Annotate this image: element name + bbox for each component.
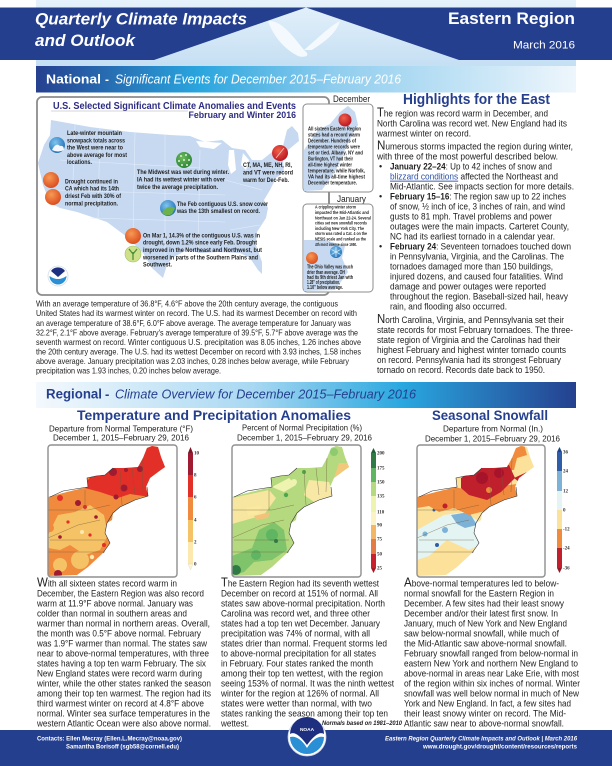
text block: precipitation narrative: states had a top ten wet December. January: [221, 619, 380, 629]
January storm text: A crippling winter storm: [315, 205, 356, 211]
temperature map subtitle: Departure from Normal Temperature (°F): [49, 423, 193, 433]
text block: temperature narrative: colder than normal in southern areas and: [37, 609, 187, 619]
legend: precipitation: [371, 448, 385, 573]
legend: temperature: 6: [194, 496, 197, 500]
map title: [51, 101, 296, 120]
label: January: January: [337, 194, 366, 204]
heading: temperature and precipitation: Temperature and Precipitation Anomalies: [77, 407, 351, 423]
text block: precipitation narrative: among their top ten wettest, with the region: [221, 669, 383, 679]
January storm text: NESIS scale and ranked as the: [315, 236, 366, 242]
national section bar: National: [46, 72, 101, 86]
Ohio Valley text: 1.10" below average.: [307, 285, 343, 291]
text block: highlights bullets: January 22–24: Up to 42 inches of snow and: [390, 162, 552, 172]
regional section bar: -: [105, 386, 109, 402]
map callouts: On Mar 1, 14.3% of the contiguous U.S. was in: [143, 232, 260, 239]
December text: December. Hundreds of: [308, 138, 356, 144]
precipitation map subtitle: Percent of Normal Precipitation (%): [242, 423, 362, 433]
text block: highlights intro: warmest winter on record.: [376, 129, 471, 139]
text block: national summary: seventh warmest on record. Winter contiguous U.S. precipitation was 8.05 inches, 1.26 inches above: [36, 337, 361, 347]
map callouts: worsened in parts of the Southern Plains and: [142, 254, 258, 261]
December text: set or tied. Albany, NY and: [308, 150, 363, 156]
snowfall map subtitle: [425, 423, 560, 443]
precipitation map subtitle: [237, 423, 372, 443]
Ohio Valley text: had its 9th driest Jan with: [307, 275, 353, 281]
December text: [308, 126, 365, 186]
text block: tornado records: state records for most February tornadoes. The three-: [377, 325, 573, 335]
text block: national summary: the 20th century average. The U.S. had its wettest December on record with 3.93 inches, 1.58 inches: [36, 346, 361, 356]
map callouts: CT, MA, ME, NH, RI,: [243, 162, 292, 169]
January storm text: impacted the Mid-Atlantic and: [315, 210, 369, 216]
label: December: December: [333, 94, 370, 104]
temperature map subtitle: [49, 423, 193, 443]
header band: [0, 8, 306, 60]
January storm text: [315, 205, 371, 248]
text block: highlights bullets: February 15–16: The region saw up to 22 inches: [390, 192, 566, 202]
legend: snowfall: [557, 447, 570, 573]
US map shape: [38, 120, 299, 278]
text block: snowfall narrative: saw below-normal snowfall, while much of: [404, 629, 559, 639]
text block: temperature narrative: the month was 0.5°F above normal. February: [37, 629, 201, 639]
chart: precipitation percent map: [231, 444, 362, 578]
text block: precipitation narrative: [220, 576, 394, 729]
text block: national summary: 32.2°F, 2.1°F above average. February's average temperature of 39.5°F, 5.7°F above average was the: [36, 327, 358, 337]
January storm text: 4th most intense since 1950.: [315, 242, 357, 248]
map callouts: twice the average precipitation.: [137, 184, 218, 191]
icon: drought 3: [125, 228, 141, 244]
text block: highlights bullets: rain, and flooding also occurred.: [390, 302, 507, 312]
panel: January box: [303, 204, 373, 292]
map title: U.S. Selected Significant Climate Anomalies and Events: [53, 101, 296, 112]
text block: highlights bullets: injured dozens, and caused four fatalities. Wind: [390, 272, 563, 282]
footer publication info: www.drought.gov/drought/content/resources/reports: [422, 744, 577, 751]
legend: snowfall: -24: [563, 546, 570, 552]
text block: snowfall narrative: January, much of New York and New England: [404, 619, 567, 629]
January storm text: Northeast on Jan 22-24. Several: [315, 215, 371, 221]
map callouts: Southwest.: [143, 262, 172, 269]
icon: NOAA logo: NOAA: [300, 727, 315, 733]
text block: precipitation narrative: in February. Four states ranked the month: [221, 659, 373, 669]
text block: highlights bullets: •: [379, 192, 382, 202]
text block: highlights bullets: blizzard conditions affected the Northeast and: [390, 172, 558, 182]
text block: temperature narrative: warmer than normal in northern areas. Overall,: [36, 619, 210, 629]
text block: highlights intro: The region was record warm in December, and: [377, 106, 548, 120]
regional section bar: Climate Overview for December 2015–February 2016: [115, 386, 417, 402]
legend: snowfall: 24: [563, 470, 568, 474]
text block: tornado records: on record. Pennsylvania had its strongest February: [377, 355, 561, 365]
text block: snowfall narrative: of the region within six inches of normal. Winter: [404, 679, 580, 689]
December text: states had a record warm: [308, 132, 360, 138]
map callouts: IA had its wettest winter with over: [137, 176, 225, 184]
panel: US anomalies map: [37, 97, 329, 295]
icon: drought improved: [125, 246, 141, 262]
December text: temperature records were: [308, 144, 360, 150]
text block: highlights bullets: throughout the region. Baseball-sized hail, heavy: [390, 292, 568, 302]
text block: temperature narrative: December, the Eastern Region was also record: [37, 589, 204, 599]
icon: record warm: [272, 145, 288, 161]
text block: tornado records: tornado on record. Records date back to 1950.: [377, 365, 545, 375]
region and date: Eastern Region: [448, 10, 575, 28]
December text: VA had its all-time highest: [308, 174, 365, 180]
icon: NOAA logo small: [48, 266, 68, 286]
icon: drought 1: [43, 172, 59, 188]
legend: precipitation: 50: [377, 552, 382, 558]
text block: temperature narrative: third warmest winter on record at 4.8°F above: [37, 699, 204, 709]
national section bar: -: [105, 72, 109, 86]
text block: temperature narrative: [36, 576, 211, 729]
text block: national summary: precipitation was 1.93 inches, 0.20 inches below average.: [36, 366, 221, 376]
text block: temperature narrative: winter, while the other states ranked the season: [36, 679, 211, 689]
footer contacts: Contacts: Ellen Mecray (Ellen.L.Mecray@noaa.gov): [37, 736, 182, 743]
legend: precipitation: 110: [377, 510, 385, 516]
text block: snowfall narrative: York and New England. In fact, a few sites had: [404, 699, 571, 709]
text block: temperature narrative: warm at 11.9°F above normal. January was: [36, 599, 193, 609]
map callouts: driest Feb with 30% of: [65, 193, 122, 200]
map callouts: locations.: [67, 159, 92, 166]
Ohio Valley text: [307, 265, 353, 291]
panel: December box: [303, 104, 373, 192]
text block: precipitation narrative: seeing 153% of normal. It was the ninth wettest: [221, 679, 394, 689]
heading: Highlights for the East: Highlights for the East: [403, 91, 550, 108]
text block: tornado records: state region of Virginia and the Carolinas had their: [377, 335, 560, 345]
text block: highlights intro: Numerous storms impacted the region during winter,: [377, 139, 573, 153]
text block: highlights bullets: NC had its earliest tornado in a calendar year.: [390, 232, 555, 242]
text block: national summary: [36, 299, 361, 376]
text block: temperature narrative: among their top ten warmest. The region had its: [37, 689, 211, 699]
connector between boxes: [328, 190, 330, 206]
map callouts: CA which had its 14th: [65, 186, 119, 193]
text block: precipitation narrative: states drier than normal. Frequent storms led: [221, 639, 387, 649]
legend: precipitation: 150: [377, 480, 385, 486]
legend: precipitation: 75: [377, 538, 382, 542]
December text: all-time highest winter: [308, 162, 352, 168]
legend: precipitation: 175: [377, 466, 385, 472]
map callouts: snowpack totals across: [67, 137, 125, 144]
legend: precipitation: 135: [377, 494, 385, 500]
map callouts: Drought continued in: [65, 178, 118, 185]
legend: temperature: 4: [194, 518, 197, 524]
legend: snowfall: 0: [563, 508, 566, 514]
map callouts: The Midwest was wet during winter.: [137, 169, 229, 176]
footer contacts: Samantha Borisoff (sgb58@cornell.edu): [66, 744, 179, 751]
chart: temperature departure map: [47, 444, 178, 578]
text block: highlights intro: North Carolina was record wet. New England had its: [377, 119, 567, 129]
legend: precipitation: 25: [377, 566, 382, 572]
footer publication info: [385, 736, 577, 751]
text block: highlights bullets: •: [379, 242, 382, 252]
footer contacts: [37, 736, 182, 751]
text block: highlights bullets: tornadoes damaged more than 150 buildings,: [390, 262, 553, 272]
text block: precipitation narrative: December on record at 151% of normal. All: [221, 589, 378, 599]
text block: highlights intro: with three of the most powerful described below.: [376, 152, 558, 162]
text block: precipitation narrative: precipitation was 74% of normal, with all: [221, 629, 370, 639]
legend: snowfall: -36: [563, 566, 570, 572]
text block: precipitation narrative: states ranking the season among their top ten: [221, 709, 388, 719]
icon: January snow: [330, 246, 342, 258]
text block: snowfall narrative: Above-normal temperatures led to below-: [404, 576, 559, 590]
region and date: March 2016: [513, 40, 575, 52]
map callouts: and VT were record: [243, 170, 293, 176]
text block: snowfall narrative: February snowfall ranged from below-normal in: [404, 649, 578, 659]
icon: December warm: [338, 114, 352, 126]
national section bar: [36, 66, 576, 92]
text block: precipitation narrative: to above-normal precipitation for all states: [221, 649, 376, 659]
text block: highlights bullets: of snow, ½ inch of ice, 3 inches of rain, and wind: [390, 202, 565, 212]
text block: precipitation narrative: states saw above-normal precipitation. North: [221, 599, 385, 609]
text block: tornado records: North Carolina, Virginia, and Pennsylvania set their: [377, 312, 564, 326]
Ohio Valley text: drier than average. OH: [307, 270, 345, 276]
icon: NOAA logo: [288, 717, 326, 756]
text block: highlights bullets: damage and power outages were reported: [390, 282, 546, 292]
January storm text: cities set new snowfall records: [315, 221, 367, 227]
map callouts: improved in the Northeast and Northwest, but: [143, 247, 263, 254]
national section bar: Significant Events for December 2015–February 2016: [115, 72, 401, 86]
regional section bar: Regional: [46, 386, 102, 402]
text block: highlights bullets: in Pennsylvania, Virginia, and the Carolinas. The: [390, 252, 564, 262]
text block: highlights bullets: February 24: Seventeen tornadoes touched down: [390, 242, 571, 252]
text block: temperature narrative: normal. Winter sea surface temperatures in the: [37, 709, 210, 719]
text block: precipitation narrative: The Eastern Region had its seventh wettest: [221, 576, 379, 590]
December text: All sixteen Eastern Region: [308, 126, 361, 132]
title: Quarterly Climate Impacts: [35, 10, 247, 28]
Ohio Valley text: 1.28" of precipitation,: [307, 280, 340, 286]
text block: snowfall narrative: normal snowfall for the Eastern Region in: [404, 589, 554, 599]
text block: highlights bullets: gusts to 81 mph. Travel problems and power: [390, 212, 552, 222]
map callouts: the West were near to: [67, 145, 123, 152]
text block: snowfall narrative: December and/or their latest first snow. In: [404, 609, 558, 619]
text block: snowfall narrative: Atlantic saw near to above-normal snowfall.: [404, 719, 564, 729]
snowfall map subtitle: December 1, 2015–February 29, 2016: [425, 433, 560, 443]
precipitation map subtitle: December 1, 2015–February 29, 2016: [237, 433, 372, 443]
region and date: [448, 10, 575, 52]
text block: tornado records: highest February and highest winter tornado counts: [377, 345, 566, 355]
text block: snowfall narrative: their least snowy winter on record. The Mid-: [404, 709, 566, 719]
text block: temperature narrative: was 1.9°F warmer than normal. The states saw: [36, 639, 207, 649]
header background strip: [36, 0, 576, 66]
title: [35, 10, 247, 50]
map callouts: Late-winter mountain: [67, 130, 122, 137]
map title: February and Winter 2016: [189, 110, 296, 120]
legend: temperature: 0: [194, 562, 197, 568]
map callouts: was the 13th smallest on record.: [176, 208, 260, 215]
icon: drought 2: [45, 189, 61, 205]
legend: snowfall: -12: [563, 528, 570, 532]
text block: national summary: above average. January precipitation was 2.03 inches, 0.28 inches below average, while February: [36, 356, 350, 366]
text block: precipitation narrative: states were wetter than normal, with two: [221, 699, 372, 709]
icon: header bird watermark: [268, 21, 340, 57]
December text: Burlington, VT had their: [308, 156, 353, 162]
text block: temperature narrative: near to above-normal temperatures, with three: [37, 649, 209, 659]
text block: snowfall narrative: eastern New York and northern New England to: [404, 659, 578, 669]
map callouts: normal precipitation.: [65, 200, 118, 207]
regional section bar: [36, 382, 576, 408]
icon: wet green: [176, 152, 192, 168]
legend: snowfall: 36: [563, 450, 568, 456]
text block: snowfall narrative: December. A few sites had their least snowy: [404, 599, 564, 609]
legend: snowfall: 12: [563, 490, 568, 494]
map callouts: above average for most: [67, 152, 128, 159]
text block: temperature narrative: New England states were record warm during: [37, 669, 202, 679]
December text: temperature, while Norfolk,: [308, 168, 365, 174]
text block: temperature narrative: With all sixteen states record warm in: [37, 576, 177, 590]
heading: seasonal snowfall: Seasonal Snowfall: [432, 407, 548, 423]
chart: snowfall departure map: [416, 444, 546, 578]
text block: snowfall narrative: the Mid-Atlantic saw above-normal snowfall.: [404, 639, 567, 649]
map callouts: warm for Dec-Feb.: [242, 177, 289, 184]
text block: temperature narrative: states having a top ten warm February. The six: [37, 659, 206, 669]
January storm text: storm was rated a Cat. 4 on the: [315, 231, 367, 237]
normals note: Normals based on 1981–2010: [322, 721, 403, 727]
legend: temperature: [188, 447, 200, 570]
icon: snow cover: [160, 200, 176, 216]
temperature map subtitle: December 1, 2015–February 29, 2016: [53, 433, 189, 443]
text block: snowfall narrative: above-normal in areas near Lake Erie, with most: [404, 669, 579, 679]
text block: highlights intro: [376, 106, 573, 162]
text block: precipitation narrative: winter for the region at 126% of normal. All: [220, 689, 379, 699]
text block: highlights bullets: outages were the main impacts. Carteret County,: [390, 222, 569, 232]
legend: temperature: 10: [194, 452, 200, 456]
text block: highlights bullets: [379, 162, 574, 312]
Ohio Valley text: The Ohio Valley was much: [307, 265, 353, 271]
text block: precipitation narrative: wettest.: [220, 719, 249, 729]
footer publication info: Eastern Region Quarterly Climate Impacts and Outlook | March 2016: [385, 736, 577, 743]
legend: temperature: 2: [194, 540, 197, 546]
legend: precipitation: 90: [377, 524, 382, 528]
text block: national summary: United States had its warmest winter on record. The U.S. had its warmest December on record with: [36, 308, 357, 318]
text block: tornado records: [377, 312, 573, 375]
January storm text: including New York City. The: [315, 226, 364, 232]
map callouts: [65, 130, 293, 269]
icon: snowpack: [49, 137, 65, 153]
text block: snowfall narrative: snowfall was well below normal in much of New: [404, 689, 579, 699]
text block: precipitation narrative: Carolina was record wet, and three other: [221, 609, 370, 619]
footer band: [0, 730, 612, 766]
icon: January dry: [306, 252, 318, 264]
map callouts: drought, down 1.2% since early Feb. Drought: [143, 240, 258, 246]
text block: snowfall narrative: [404, 576, 580, 729]
title: and Outlook: [35, 31, 137, 50]
map callouts: The Feb contiguous U.S. snow cover: [177, 201, 268, 208]
legend: precipitation: 200: [377, 452, 385, 456]
December text: December temperature.: [308, 180, 357, 186]
text block: temperature narrative: western Atlantic Ocean were also above normal.: [36, 719, 211, 729]
legend: temperature: 8: [194, 474, 197, 478]
text block: national summary: With an average temperature of 36.8°F, 4.6°F above the 20th century average, the contiguous: [36, 299, 338, 309]
text block: highlights bullets: Mid-Atlantic. See impacts section for more details.: [390, 182, 574, 192]
text block: highlights bullets: •: [379, 162, 382, 172]
text block: national summary: an average temperature of 38.6°F, 6.0°F above average. The average temperature for January was: [36, 318, 351, 328]
snowfall map subtitle: Departure from Normal (In.): [443, 423, 543, 433]
